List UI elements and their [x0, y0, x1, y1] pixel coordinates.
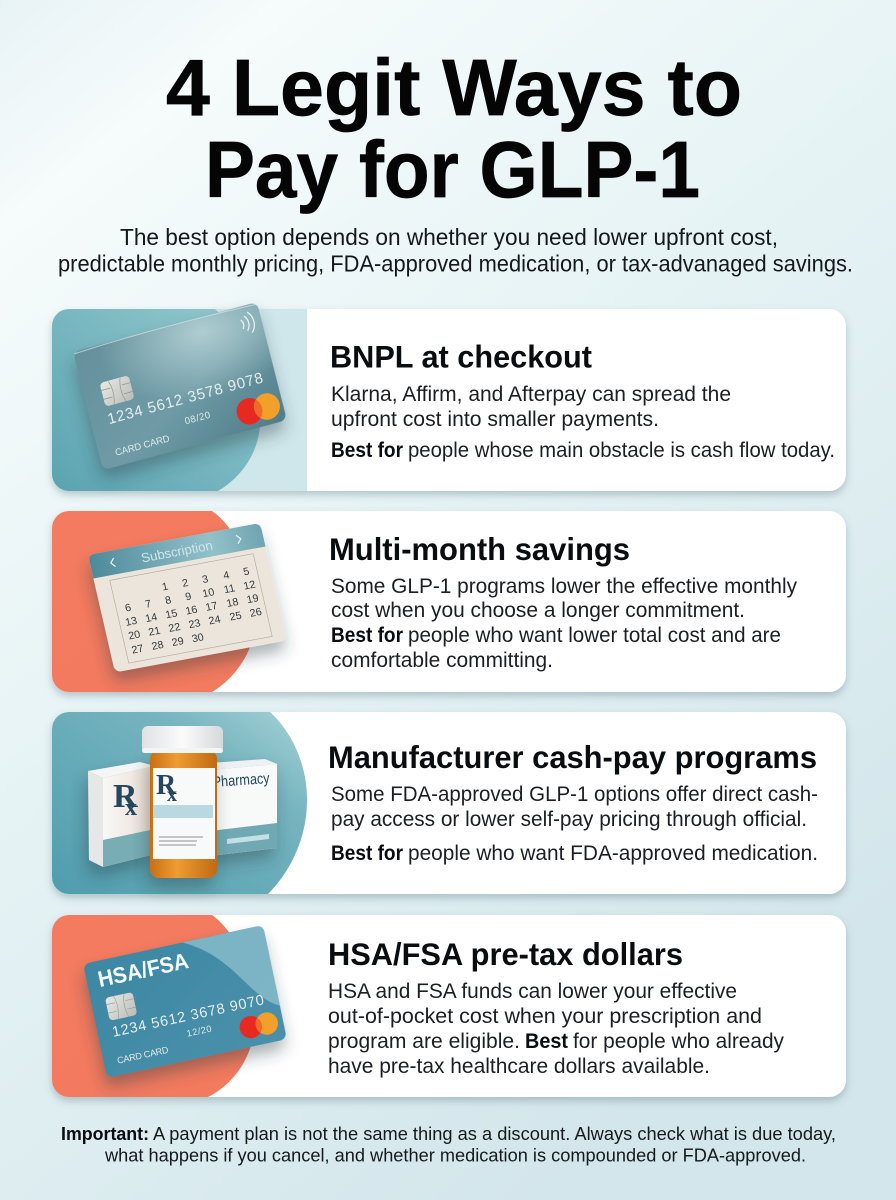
icon: HSA/FSA card	[83, 925, 287, 1078]
title	[166, 43, 742, 214]
icon: calendar: 15	[164, 607, 179, 621]
icon: calendar: 5	[242, 566, 251, 578]
icon: calendar: 11	[223, 582, 236, 596]
subtitle	[58, 224, 853, 276]
title: Pay for GLP-1	[205, 125, 700, 214]
description	[331, 575, 797, 622]
icon: calendar: 21	[147, 625, 162, 639]
description: upfront cost into smaller payments.	[331, 408, 659, 431]
description: cost when you choose a longer commitment.	[331, 599, 745, 622]
heading: Manufacturer cash-pay programs	[328, 739, 817, 775]
icon: calendar: 30	[191, 631, 205, 645]
icon: pharmacy box left	[88, 762, 155, 867]
icon: HSA/FSA card: HSA/FSA	[96, 948, 191, 992]
icon: calendar: 14	[144, 611, 159, 625]
subtitle: The best option depends on whether you need lower upfront cost,	[120, 224, 778, 250]
icon: calendar: 10	[201, 586, 216, 600]
icon: HSA/FSA card: 1234 5612 3678 9070	[111, 992, 266, 1041]
image panel: teal backdrop	[52, 309, 307, 491]
icon: calendar: 16	[184, 604, 199, 618]
icon: HSA/FSA card: 12/20	[186, 1024, 212, 1039]
description: Klarna, Affirm, and Afterpay can spread the	[331, 383, 731, 406]
icon: calendar: 7	[144, 598, 153, 611]
icon: calendar: 17	[204, 600, 219, 614]
best for: comfortable committing.	[331, 649, 553, 672]
icon: credit card: CARD CARD	[114, 433, 171, 459]
icon: credit card: 1234 5612 3578 9078	[106, 369, 265, 428]
icon: credit card: 08/20	[184, 410, 211, 427]
image panel: coral backdrop	[52, 915, 255, 1097]
best for: people who want lower total cost and are	[408, 624, 781, 647]
icon: calendar: 8	[164, 594, 173, 607]
icon: pill bottle	[142, 726, 223, 878]
description: for people who already	[573, 1030, 784, 1053]
description: HSA and FSA funds can lower your effective	[328, 980, 737, 1003]
title: 4 Legit Ways to	[166, 43, 742, 132]
icon: calendar: 9	[184, 591, 193, 603]
panel: HSA/FSA pre-tax dollars	[52, 915, 846, 1097]
description: pay access or lower self-pay pricing through official.	[331, 808, 807, 831]
icon: calendar: 20	[127, 629, 142, 642]
icon: pill bottle: x	[167, 784, 177, 806]
icon: calendar: 1	[161, 581, 169, 593]
icon: pharmacy box left: R	[113, 778, 138, 815]
icon: calendar: 23	[187, 617, 202, 631]
icon: calendar: 4	[222, 569, 231, 582]
panel: Multi-month savings	[52, 511, 846, 692]
description: Best	[525, 1030, 568, 1053]
heading: HSA/FSA pre-tax dollars	[328, 936, 683, 972]
best for	[331, 624, 781, 672]
description: Some GLP-1 programs lower the effective monthly	[331, 575, 797, 598]
icon: calendar	[88, 523, 287, 672]
icon: calendar: 22	[167, 621, 182, 635]
icon: calendar: 6	[124, 602, 132, 615]
icon: calendar: 13	[124, 615, 139, 629]
best for: Best for	[331, 624, 403, 647]
icon: calendar: 18	[225, 596, 240, 610]
best for: Best for	[331, 842, 403, 865]
description: program are eligible.	[328, 1030, 520, 1053]
best for: people whose main obstacle is cash flow today.	[408, 439, 835, 462]
description	[328, 980, 784, 1078]
footer note	[61, 1124, 836, 1166]
panel: BNPL at checkout	[52, 302, 846, 491]
icon: calendar: 19	[245, 592, 260, 606]
description	[331, 783, 818, 831]
image panel: teal backdrop	[52, 712, 307, 894]
heading: BNPL at checkout	[330, 338, 592, 374]
icon: calendar: Subscription	[140, 538, 214, 565]
icon: pharmacy box left: x	[125, 795, 137, 821]
image panel: coral backdrop	[52, 511, 256, 692]
description: out-of-pocket cost when your prescription and	[328, 1005, 762, 1028]
description: have pre-tax healthcare dollars available.	[328, 1055, 710, 1078]
icon: credit card	[73, 302, 287, 470]
icon: calendar: 24	[208, 614, 222, 627]
icon: calendar: 28	[151, 639, 165, 653]
icon: pharmacy box right	[210, 759, 277, 856]
icon: calendar: 25	[229, 610, 243, 624]
footer note: A payment plan is not the same thing as a discount. Always check what is due today,	[153, 1124, 836, 1144]
icon: calendar: 2	[181, 577, 190, 590]
icon: calendar: 3	[201, 573, 210, 586]
icon: calendar: 27	[130, 643, 145, 656]
best for: people who want FDA-approved medication.	[408, 842, 818, 865]
description: Some FDA-approved GLP-1 options offer direct cash-	[331, 783, 818, 806]
icon: pill bottle: R	[156, 770, 177, 801]
icon: HSA/FSA card: CARD CARD	[116, 1045, 170, 1066]
footer note: Important:	[61, 1124, 149, 1144]
panel: Manufacturer cash-pay programs	[52, 712, 846, 894]
icon: calendar: 26	[249, 606, 263, 620]
icon: calendar: 12	[242, 579, 257, 593]
icon: calendar: 29	[171, 635, 185, 649]
best for: Best for	[331, 439, 403, 462]
subtitle: predictable monthly pricing, FDA-approved medication, or tax-advanaged savings.	[58, 250, 853, 276]
heading: Multi-month savings	[329, 531, 630, 567]
footer note: what happens if you cancel, and whether medication is compounded or FDA-approved.	[104, 1146, 806, 1166]
icon: pharmacy box right: Pharmacy	[212, 770, 271, 791]
description	[331, 383, 731, 431]
